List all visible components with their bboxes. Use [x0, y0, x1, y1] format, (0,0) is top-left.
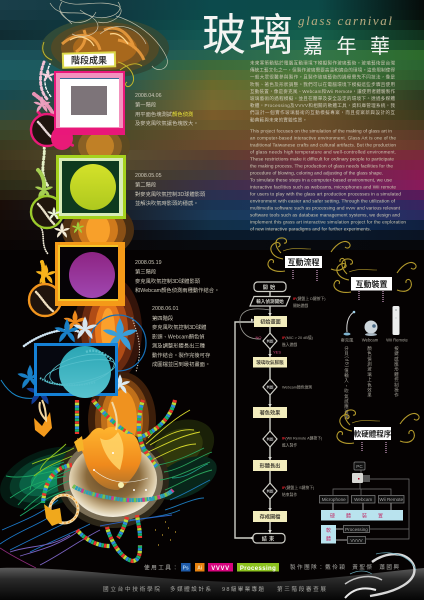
text: stage 4: 影頭、Webcam顏色偵	[152, 332, 205, 340]
software tools	[344, 526, 370, 544]
text: Chinese abstract: 互動裝置，像是麥克風、Webcam和Wii Remote，讓使用者體驗製作	[250, 88, 396, 95]
text: stage 3: 2008.05.19	[135, 260, 162, 266]
device labels: Webcam	[362, 338, 379, 342]
text: Chinese abstract: 玻璃藝術的過程模擬，並且在簡單及安全設定的環境下。透過多媒體	[250, 95, 396, 102]
text: English abstract: an computer-based interactive environment. Glass Art is one of the	[250, 136, 396, 140]
software block: 軟	[326, 527, 331, 534]
text: stage 3: 和Webcam顏色偵測兩種動作結合。	[135, 286, 219, 294]
heading: stage results label: 階段成果	[71, 54, 107, 66]
title: 玻璃	[202, 11, 293, 60]
flow notes: 進入製作	[282, 442, 297, 448]
icon: PC: PC	[356, 464, 363, 469]
flow: coloring	[253, 407, 287, 418]
flow: decision mic	[263, 333, 277, 349]
text: English abstract: This project focuses on the simulation of the making of glass art in	[250, 128, 392, 134]
flow notes: IF(鍵盤上 S鍵按下)	[282, 485, 315, 490]
heading: devices label: 互動裝置	[356, 279, 388, 289]
flow connectors	[235, 291, 272, 540]
flow: glass blow	[253, 357, 287, 368]
flow: shape growth	[253, 460, 287, 471]
panel: stage 1 image	[31, 69, 125, 150]
text: Chinese abstract: 一般大眾很難參與製作。且製作玻璃藝術的過程需先不同技法，像是	[250, 74, 396, 81]
text: English abstract: software tools such as database management systems, we design and	[250, 212, 400, 218]
glass ball with flame	[69, 427, 173, 517]
heading: stage results label	[62, 51, 116, 69]
hardware inputs	[320, 496, 404, 503]
text: stage 3: 麥克風吹氣控制3D球體影頭	[135, 277, 201, 285]
panel: stage 4 image	[1, 315, 146, 405]
text: English abstract: of glass needs high temperature and well-controlled environment.	[250, 150, 396, 154]
text: stage 2: 對麥克風吹氣控制3D球體影頭	[135, 190, 206, 198]
title: glass carnival	[298, 13, 392, 28]
hardware block: 硬體裝置	[330, 512, 394, 520]
footer band	[0, 568, 424, 600]
heading: flow label	[268, 238, 350, 282]
icon: webcam	[364, 320, 378, 336]
swirling fire top	[41, 0, 169, 87]
footer band: 98級畢業專題	[222, 585, 264, 593]
tools used: Processing	[240, 566, 276, 572]
flow notes: 結束製作	[282, 492, 297, 497]
heading: devices label	[334, 259, 416, 303]
text: Chinese abstract: 未來寒策動點於電腦互動環境下模擬製作玻璃藝術。玻璃藝術是台灣	[250, 60, 396, 66]
text: English abstract	[250, 128, 406, 232]
text: stage 3	[135, 260, 219, 294]
text: English abstract: procedure of blowing, coloring and adjusting of the glass shape.	[250, 170, 383, 176]
text: stage 1	[135, 93, 199, 127]
streaks around the glass ball	[0, 402, 212, 568]
text: stage 3: 第三階段	[135, 268, 157, 276]
title	[202, 11, 392, 60]
flow notes: IF(MIC > 20 dB值)	[282, 335, 314, 340]
text: Chinese abstract: 吹製、著色及形狀調整。我們可以在電腦環境下模擬這些步驟且使用	[250, 81, 395, 88]
text: Chinese abstract	[250, 60, 396, 123]
text: stage 1: 用平面色塊測試顏色偵測	[135, 110, 193, 118]
text: stage 2	[135, 173, 206, 207]
flow: shape growth: 形體長出	[260, 462, 280, 470]
text: stage 4: 測及調整形體長出三種	[152, 342, 206, 350]
panel: stage 2 image	[31, 155, 126, 238]
flow notes: 進入遊戲	[282, 342, 297, 347]
text: stage 2: 第二階段	[135, 180, 157, 188]
software block	[321, 525, 336, 544]
flow: input: 輸入偵測開始	[256, 298, 284, 305]
footer band: 國立台中技術學院	[103, 585, 160, 593]
beaded glass chains	[43, 400, 175, 561]
process connectors	[333, 470, 409, 540]
glow behind streaks	[0, 408, 223, 528]
text: stage 2: 並解決吹氣時影頭的穩感。	[135, 199, 199, 207]
footer band: 多媒體設計系	[170, 585, 211, 593]
flow: decision keyboard: 判斷	[266, 488, 274, 494]
flow notes: YES	[273, 350, 281, 354]
hardware inputs: Microphone	[322, 497, 346, 502]
flow: decision webcam: 判斷	[266, 384, 274, 390]
flow: start	[254, 282, 286, 292]
device labels: 顏色偵測玻璃上色效果	[367, 345, 372, 399]
flow: save image	[253, 511, 287, 522]
production team: 製作團隊：戴伶穎 黃聖傑 蕭國興	[290, 563, 399, 571]
flow: save image: 存成圖檔	[260, 512, 280, 520]
flow notes: Webcam顏色偵測	[282, 384, 312, 390]
flow: decision wii	[263, 431, 277, 447]
text: Chinese abstract: 們設計一個實作玻璃藝術的互動模擬專案，而且提案新興設計的互	[250, 109, 396, 116]
tools used: Ps	[183, 566, 189, 572]
tools used	[144, 563, 279, 572]
flow: start: 開始	[263, 283, 277, 291]
device labels: 麥克風	[341, 336, 354, 344]
flow notes: 開始遊戲	[293, 303, 308, 308]
software tools: VVVV	[350, 538, 364, 543]
flow: decision keyboard	[263, 483, 277, 499]
flow notes: NO	[256, 335, 262, 340]
device labels: 分貝(dB)值輸入，吹氣感應玻璃	[344, 346, 350, 420]
flow: glass blow: 玻璃吹氣膨脹	[256, 359, 284, 366]
text: English abstract: the making process. The production of glass needs facilities for the	[250, 164, 393, 168]
flow: end	[253, 534, 285, 543]
software block: 體	[326, 536, 331, 542]
text: English abstract: implement this grass art interactive simulation project for the exploration	[250, 220, 406, 224]
footer band: 第三階段審查展	[277, 585, 326, 593]
flow notes: IF(鍵盤上 D鍵按下)	[293, 296, 326, 301]
text: English abstract: for users to play with the glass art production processes in a simulated	[250, 192, 401, 196]
text: English abstract: multimedia software such as processing and vvvv and various relevant	[250, 206, 401, 210]
text: stage 4: 第四階段	[152, 314, 174, 322]
title: 嘉年華	[303, 35, 390, 58]
flow notes	[256, 296, 326, 497]
text: stage 4: 2008.06.01	[152, 306, 179, 312]
text: stage 4: 成圖檔並回到最初畫面。	[152, 360, 210, 368]
text: stage 4	[152, 306, 211, 368]
heading: flow label: 互動流程	[288, 257, 320, 267]
text: English abstract: environment with easier and safer setting. Through the utilization of	[250, 198, 396, 204]
tools used: Ai	[197, 566, 203, 572]
tools used: VVVV	[211, 566, 230, 572]
hardware inputs: Webcam	[354, 497, 372, 502]
panel: stage 3 image	[29, 242, 125, 332]
panel: interaction flowchart	[235, 238, 350, 543]
text: stage 4: 動作結合。製作完後可存	[152, 351, 211, 359]
silver swirl	[345, 553, 416, 598]
text: Chinese abstract: 軟體，Processing及VVVV和相關的軟體工具，資料庫管理系統，我	[250, 102, 396, 109]
flow: coloring: 著色效果	[260, 408, 281, 416]
splatter left column	[24, 62, 139, 372]
device labels: Wii Remote	[386, 338, 408, 342]
software tools: Processing	[345, 527, 368, 532]
text: stage 4: 麥克風吹氣控制3D球體	[152, 323, 207, 331]
text: Chinese abstract: 傳統工藝文化之一，但製作玻璃需要高溫和適合的環境。這些限制使得	[250, 67, 396, 74]
flow notes: IF(Wii Remote A鍵按下)	[282, 436, 323, 440]
text: stage 2: 2008.05.05	[135, 173, 162, 179]
flow: initial screen	[254, 316, 287, 327]
tools used: 使用工具：	[144, 564, 178, 572]
panel: interactive devices	[334, 259, 416, 420]
flow: decision mic: 判斷	[266, 338, 274, 344]
text: stage 1: 2008.04.06	[135, 93, 162, 99]
flow: decision webcam	[263, 379, 277, 395]
text: stage 1: 第一階段	[135, 100, 157, 108]
text: English abstract: interactive facilities such as webcams, microphones and Wii remote	[250, 184, 396, 190]
flow: input	[250, 296, 290, 306]
text: English abstract: of new interactive paradigms and for further experiments.	[250, 226, 371, 232]
icon: wii remote	[392, 306, 400, 335]
flow: initial screen: 初始畫面	[260, 318, 281, 326]
panel: software and hardware process	[320, 410, 419, 544]
text: English abstract: To simulate these steps in a computer-based environment, we use	[250, 178, 392, 182]
flow: decision wii: 判斷	[266, 436, 274, 442]
device labels: 按鍵感應形體控制操作	[394, 345, 400, 399]
text: English abstract: These restrictions make it difficult for ordinary people to participate	[250, 156, 394, 162]
hardware inputs: Wii Remote	[379, 497, 404, 502]
text: stage 1: 及麥克風吹氣讓色塊放大。	[135, 119, 199, 127]
text: English abstract: traditional Taiwanese crafts and cultural artifacts. But the production	[250, 142, 396, 148]
text: Chinese abstract: 動典範與未來的實驗性質。	[250, 116, 307, 123]
flame rings	[34, 400, 117, 526]
flow: end: 結束	[262, 534, 276, 542]
heading: process label: 軟硬體程序	[354, 428, 392, 438]
icon: microphone	[344, 311, 355, 336]
device labels	[341, 336, 408, 420]
flames behind frames	[62, 124, 156, 468]
